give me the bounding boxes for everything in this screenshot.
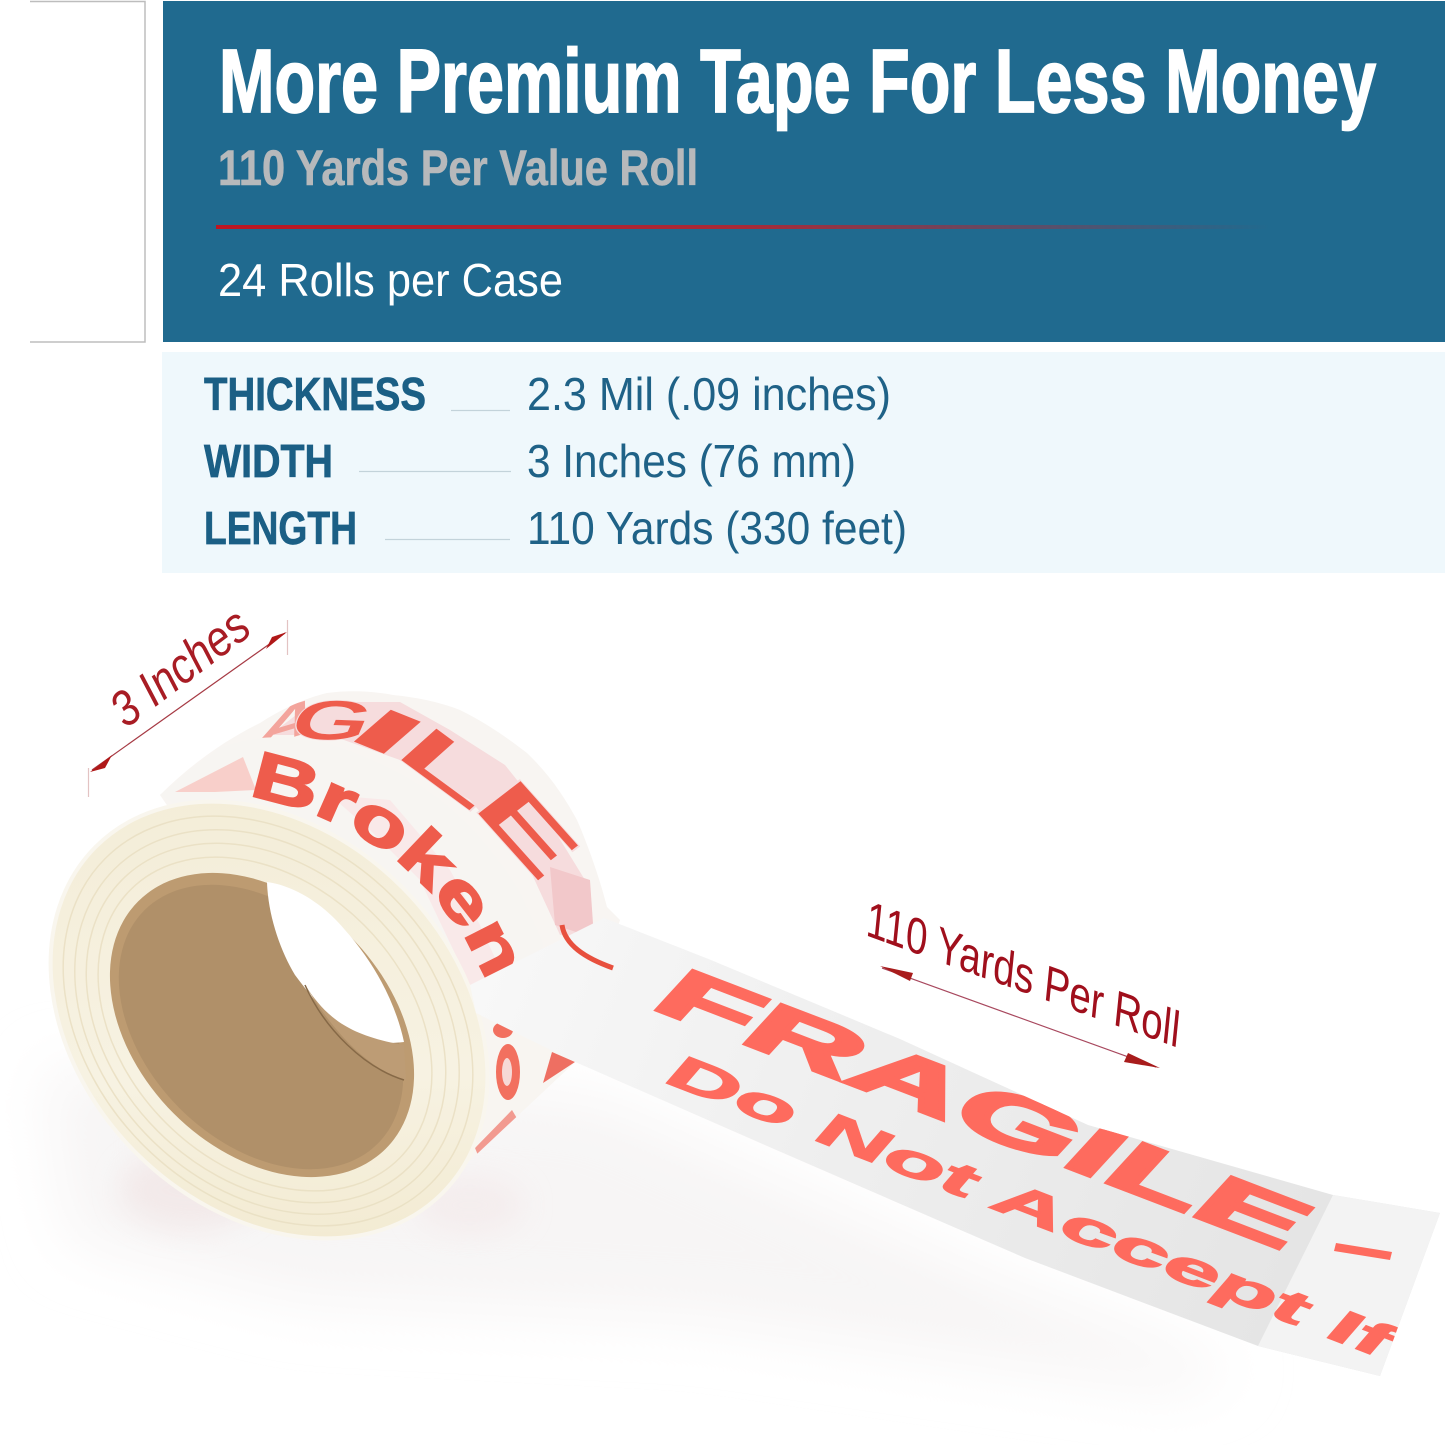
roll end face	[0, 714, 575, 1326]
red divider	[216, 225, 1270, 229]
red hook mark	[562, 925, 613, 968]
FRAGILE: FRAGILE	[636, 955, 1331, 1263]
inner core back wall	[305, 985, 406, 1080]
spec: thickness: 2.3 Mil (.09 inches)	[527, 368, 891, 420]
panel: header	[163, 1, 1445, 342]
label: 110 Yards Per Roll: 110 Yards Per Roll	[864, 890, 1183, 1059]
spec: width: WIDTH	[204, 435, 333, 487]
spec: length: LENGTH	[204, 502, 357, 554]
printed tape text	[636, 955, 1409, 1366]
tape end flap	[1258, 1195, 1440, 1376]
printed FRAGILE letters on roll	[262, 700, 593, 936]
case count: 24 Rolls per Case	[218, 254, 563, 306]
spec: length: 110 Yards (330 feet)	[527, 502, 907, 554]
wound tape layers	[0, 734, 555, 1308]
printed FRAGILE letters on roll: A	[244, 682, 333, 762]
spec: length	[204, 502, 907, 554]
dimension: 3 inches	[88, 597, 288, 797]
band under tape	[475, 1024, 575, 1154]
spec: thickness	[204, 368, 891, 420]
panel: specifications	[162, 352, 1445, 573]
illustration: unrolled tape strip	[470, 918, 1440, 1376]
label: 3 Inches: 3 Inches	[99, 597, 260, 738]
printed FRAGILE letters on roll: L	[380, 711, 521, 824]
spec: width	[204, 435, 856, 487]
white inner band with Broken: Broken	[252, 751, 514, 978]
cardboard core	[50, 813, 474, 1237]
dimension: 110 yards	[864, 890, 1183, 1068]
soft floor shadows	[45, 1070, 1240, 1390]
illustration: tape roll	[48, 692, 620, 1236]
printed FRAGILE letters on roll: G	[280, 687, 385, 753]
spec: thickness: THICKNESS	[204, 368, 426, 420]
core hole	[267, 882, 404, 1043]
roll side band	[160, 691, 620, 1183]
spec: width: 3 Inches (76 mm)	[527, 435, 856, 487]
subtitle: 110 Yards Per Value Roll	[218, 140, 698, 196]
Do Not Accept If: Do Not Accept If	[654, 1047, 1409, 1366]
printed FRAGILE letters on roll: E	[456, 762, 599, 897]
ghost print	[270, 702, 595, 938]
left outlined empty box	[30, 2, 145, 342]
printed FRAGILE letters on roll: I	[328, 694, 446, 769]
